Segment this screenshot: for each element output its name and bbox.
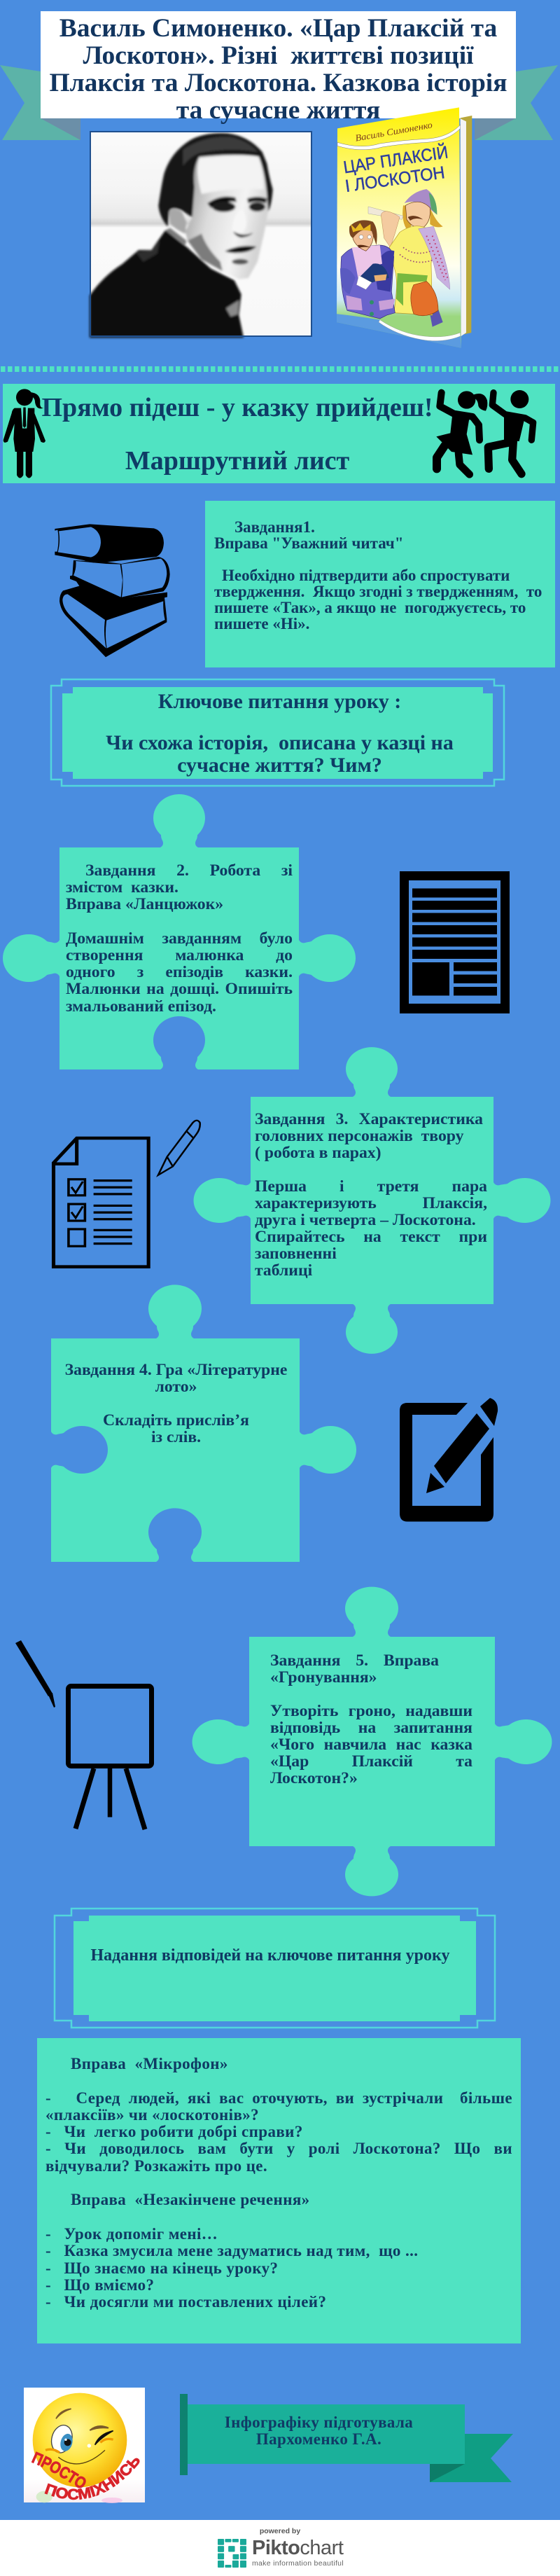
panel: task 3 puzzle piece: друга і четверта – Лоскотона. [255, 1211, 476, 1229]
panel: task 5 puzzle piece: «Гронування» [270, 1668, 377, 1687]
title: Василь Симоненко. «Цар Плаксій та [59, 14, 497, 42]
label: powered by: powered by [260, 2527, 300, 2535]
author ribbon: Пархоменко Г.А. [256, 2430, 382, 2448]
title: Лоскотон». Різні життєві позиції [83, 41, 474, 70]
author ribbon: Інфографіку підготувала [225, 2414, 413, 2431]
panel: task 3 puzzle piece: Завдання 3. Характеристика [255, 1109, 483, 1128]
author ribbon [180, 2394, 513, 2482]
panel: task 1: Завдання1. [234, 518, 315, 536]
panel: task 2 puzzle piece: Домашнім завданням було [66, 929, 293, 948]
panel: task 1 [205, 501, 555, 667]
panel: task 5 puzzle piece: «Чого навчила нас казка [270, 1736, 472, 1754]
panel: task 4 puzzle piece: лото» [155, 1378, 197, 1396]
icon: edit note with pen [400, 1398, 498, 1521]
photo: portrait of Vasyl Symonenko [88, 131, 312, 340]
panel: microphone and unfinished sentence exercises [37, 2038, 521, 2343]
panel: route sheet banner [3, 384, 555, 483]
heading: route sheet: Маршрутний лист [125, 446, 349, 476]
panel: microphone and unfinished sentence exercises: - Чи доводилось вам бути у ролі Лоскотона? Що ви [46, 2140, 512, 2157]
panel: task 3 puzzle piece: Спирайтесь на текст при [255, 1228, 487, 1246]
panel: task 5 puzzle piece: Лоскотон?» [270, 1769, 358, 1787]
panel: microphone and unfinished sentence exercises: - Що вміємо? [46, 2276, 154, 2294]
icon: stack of books [55, 524, 170, 657]
panel: microphone and unfinished sentence exercises: - Серед людей, які вас оточують, ви зустрічали більше [46, 2089, 512, 2107]
panel: task 5 puzzle piece: Завдання 5. Вправа [270, 1651, 439, 1670]
title: Плаксія та Лоскотона. Казкова історія [49, 69, 507, 97]
panel: task 4 puzzle piece [51, 1284, 356, 1562]
panel: key question of the lesson: Чи схожа історія, описана у казці на [106, 731, 454, 754]
tagline: make information beautiful [252, 2559, 344, 2568]
wordmark: Piktochart: Piktochart [252, 2537, 343, 2559]
panel: task 2 puzzle piece: змістом казки. [66, 878, 178, 896]
panel: microphone and unfinished sentence exercises: «плаксіїв» чи «лоскотонів»? [46, 2106, 259, 2124]
panel: microphone and unfinished sentence exercises: Вправа «Мікрофон» [71, 2055, 228, 2072]
heading: banner title: Прямо підеш - у казку прийдеш! [42, 393, 433, 422]
panel: task 4 puzzle piece: Завдання 4. Гра «Літературне [65, 1360, 287, 1378]
icon: easel with pen [15, 1640, 154, 1830]
panel: task 2 puzzle piece: створення малюнка до [66, 946, 293, 964]
header ribbon tails [0, 65, 558, 140]
panel: task 1: Необхідно підтвердити або спростувати [222, 567, 510, 584]
panel: microphone and unfinished sentence exercises: - Чи легко робити добрі справи? [46, 2123, 303, 2140]
panel: task 2 puzzle piece: змальований епізод. [66, 997, 216, 1016]
panel: task 5 puzzle piece: «Цар Плаксій та [270, 1752, 472, 1771]
panel: key question of the lesson [50, 678, 505, 787]
panel: task 2 puzzle piece: одного з епізодів казки. [66, 963, 293, 981]
logo mark [218, 2539, 246, 2568]
panel: microphone and unfinished sentence exercises: - Що знаємо на кінець уроку? [46, 2259, 278, 2277]
panel: task 2 puzzle piece [3, 794, 356, 1069]
title [41, 11, 516, 118]
panel: task 3 puzzle piece [193, 1047, 550, 1354]
footer: powered by Piktochart [0, 2520, 560, 2576]
image: winking smiley: ПОСМІХНИСЬ! [45, 2458, 140, 2500]
panel: key question of the lesson: Ключове питання уроку : [158, 690, 401, 713]
image: winking smiley: ПРОСТО [31, 2451, 86, 2488]
book cover: Цар Плаксій і Лоскотон: Василь Симоненко [354, 119, 433, 144]
panel: microphone and unfinished sentence exercises: Вправа «Незакінчене речення» [71, 2191, 310, 2208]
panel: task 2 puzzle piece: Вправа «Ланцюжок» [66, 895, 223, 913]
panel: task 5 puzzle piece: відповідь на запитання [270, 1719, 472, 1737]
panel: task 2 puzzle piece: Малюнки на дошці. Опишіть [66, 980, 293, 998]
panel: key question of the lesson: сучасне життя? Чим? [177, 754, 382, 777]
panel: task 4 puzzle piece: Складіть прислів’я [103, 1411, 249, 1429]
panel: task 2 puzzle piece: Завдання 2. Робота зі [85, 861, 293, 880]
icon: checklist and pencil [52, 1119, 201, 1268]
icon: dancing children [433, 389, 536, 478]
panel: task 3 puzzle piece: Перша і третя пара [255, 1177, 487, 1196]
panel: task 3 puzzle piece: заповненні [255, 1245, 337, 1263]
panel: microphone and unfinished sentence exercises: - Казка змусила мене задуматись над тим, що ... [46, 2242, 418, 2259]
panel: microphone and unfinished sentence exercises: - Урок допоміг мені… [46, 2225, 218, 2243]
icon: newspaper document [400, 871, 510, 1013]
panel: task 3 puzzle piece: головних персонажів твору [255, 1127, 463, 1145]
book cover: Цар Плаксій і Лоскотон: І ЛОСКОТОН [344, 163, 446, 196]
panel: task 3 puzzle piece: ( робота в парах) [255, 1144, 382, 1162]
panel: task 5 puzzle piece: Утворіть гроно, надавши [270, 1702, 472, 1720]
panel: microphone and unfinished sentence exercises: відчували? Розкажіть про це. [46, 2157, 267, 2175]
panel: task 1: Вправа "Уважний читач" [214, 534, 404, 552]
panel: task 5 puzzle piece [192, 1587, 552, 1897]
panel: task 1: пишете «Ні». [214, 615, 309, 632]
panel: task 1: пишете «Так», а якщо не погоджуєтесь, то [214, 599, 526, 616]
panel: answers to the key question [53, 1908, 496, 2028]
panel: answers to the key question: Надання відповідей на ключове питання уроку [90, 1946, 449, 1965]
panel: task 3 puzzle piece: характеризують Плаксія, [255, 1194, 487, 1212]
panel: microphone and unfinished sentence exercises: - Чи досягли ми поставлених цілей? [46, 2293, 326, 2311]
book cover: Цар Плаксій і Лоскотон: ЦАР ПЛАКСІЙ [342, 142, 449, 177]
panel: task 3 puzzle piece: таблиці [255, 1261, 312, 1280]
book cover: Цар Плаксій і Лоскотон [337, 107, 472, 347]
panel: task 1: твердження. Якщо згодні з твердженням, то [214, 583, 542, 600]
icon: woman [3, 389, 46, 478]
panel: task 4 puzzle piece: із слів. [151, 1428, 201, 1446]
title: та сучасне життя [176, 95, 380, 125]
